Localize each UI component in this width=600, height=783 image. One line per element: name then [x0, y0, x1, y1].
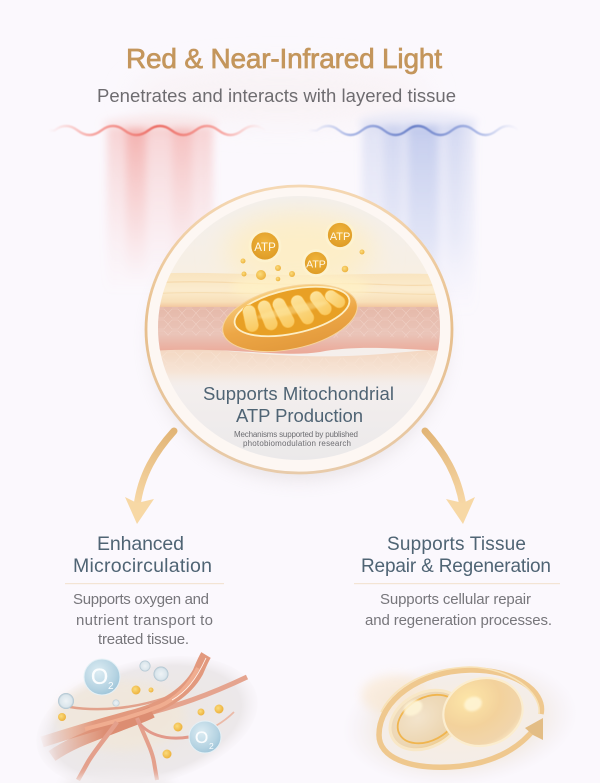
central circle panel — [146, 186, 452, 480]
cristae folds — [241, 288, 347, 333]
illustration: blood vessels and oxygen — [40, 652, 250, 783]
icon: oxygen bubble small: 2 — [209, 741, 214, 751]
icon: ATP badge 2 — [326, 222, 354, 248]
icon: oxygen bubble large — [84, 659, 120, 695]
icon: ATP badge 3 — [304, 250, 328, 276]
body text — [73, 591, 213, 648]
arrow: left — [125, 431, 174, 524]
subtitle: Penetrates and interacts with layered tissue — [97, 85, 456, 106]
heading — [361, 534, 551, 577]
icon: ATP badge 2: ATP — [330, 231, 350, 243]
arrow: right — [425, 431, 475, 524]
icon: ATP badge 3: ATP — [306, 258, 326, 270]
illustration: cell repair — [336, 646, 584, 783]
heading: Supports Tissue — [387, 534, 526, 555]
body text: treated tissue. — [98, 631, 189, 648]
vessels — [42, 655, 247, 780]
heading: Enhanced — [97, 533, 184, 555]
cream tissue layer — [150, 273, 450, 307]
body text: and regeneration processes. — [365, 612, 552, 629]
cell: right — [436, 670, 530, 754]
column: microcirculation — [65, 533, 224, 648]
heading: Microcirculation — [73, 555, 212, 577]
mitochondrion — [222, 284, 358, 352]
circle footnote: photobiomodulation research — [243, 439, 351, 448]
small bubbles — [58, 660, 168, 709]
icon: ATP badge 1: ATP — [254, 242, 276, 254]
circle footnote — [234, 430, 358, 448]
red wave — [48, 126, 266, 135]
icon: ATP badge 1 — [251, 232, 279, 260]
gold nutrient dots — [58, 686, 224, 758]
cell: left — [380, 678, 472, 762]
repair ring — [379, 670, 541, 767]
blue light beams — [358, 112, 478, 315]
column: tissue repair — [354, 534, 560, 629]
circle heading line 2: ATP Production — [236, 405, 363, 426]
rising particles — [240, 250, 364, 281]
heading: Repair & Regeneration — [361, 556, 551, 577]
icon: oxygen bubble large: O — [91, 664, 108, 689]
arrow head — [525, 718, 543, 740]
icon: oxygen bubble large: 2 — [108, 681, 114, 692]
icon: oxygen bubble small: O — [195, 728, 208, 747]
body text — [365, 591, 552, 629]
tissue layers — [150, 212, 450, 392]
circle footnote: Mechanisms supported by published — [234, 430, 358, 439]
red light beams — [102, 115, 218, 293]
title: Red & Near-Infrared Light — [126, 43, 442, 74]
circle heading: Supports Mitochondrial — [203, 383, 394, 404]
body text: nutrient transport to — [76, 612, 213, 629]
heading — [73, 533, 212, 577]
pink tissue layer — [150, 305, 450, 354]
icon: oxygen bubble small — [189, 721, 221, 753]
body text: Supports oxygen and — [73, 591, 209, 608]
blue wave — [308, 126, 519, 135]
lower tissue layer — [160, 348, 438, 380]
body text: Supports cellular repair — [380, 591, 531, 608]
